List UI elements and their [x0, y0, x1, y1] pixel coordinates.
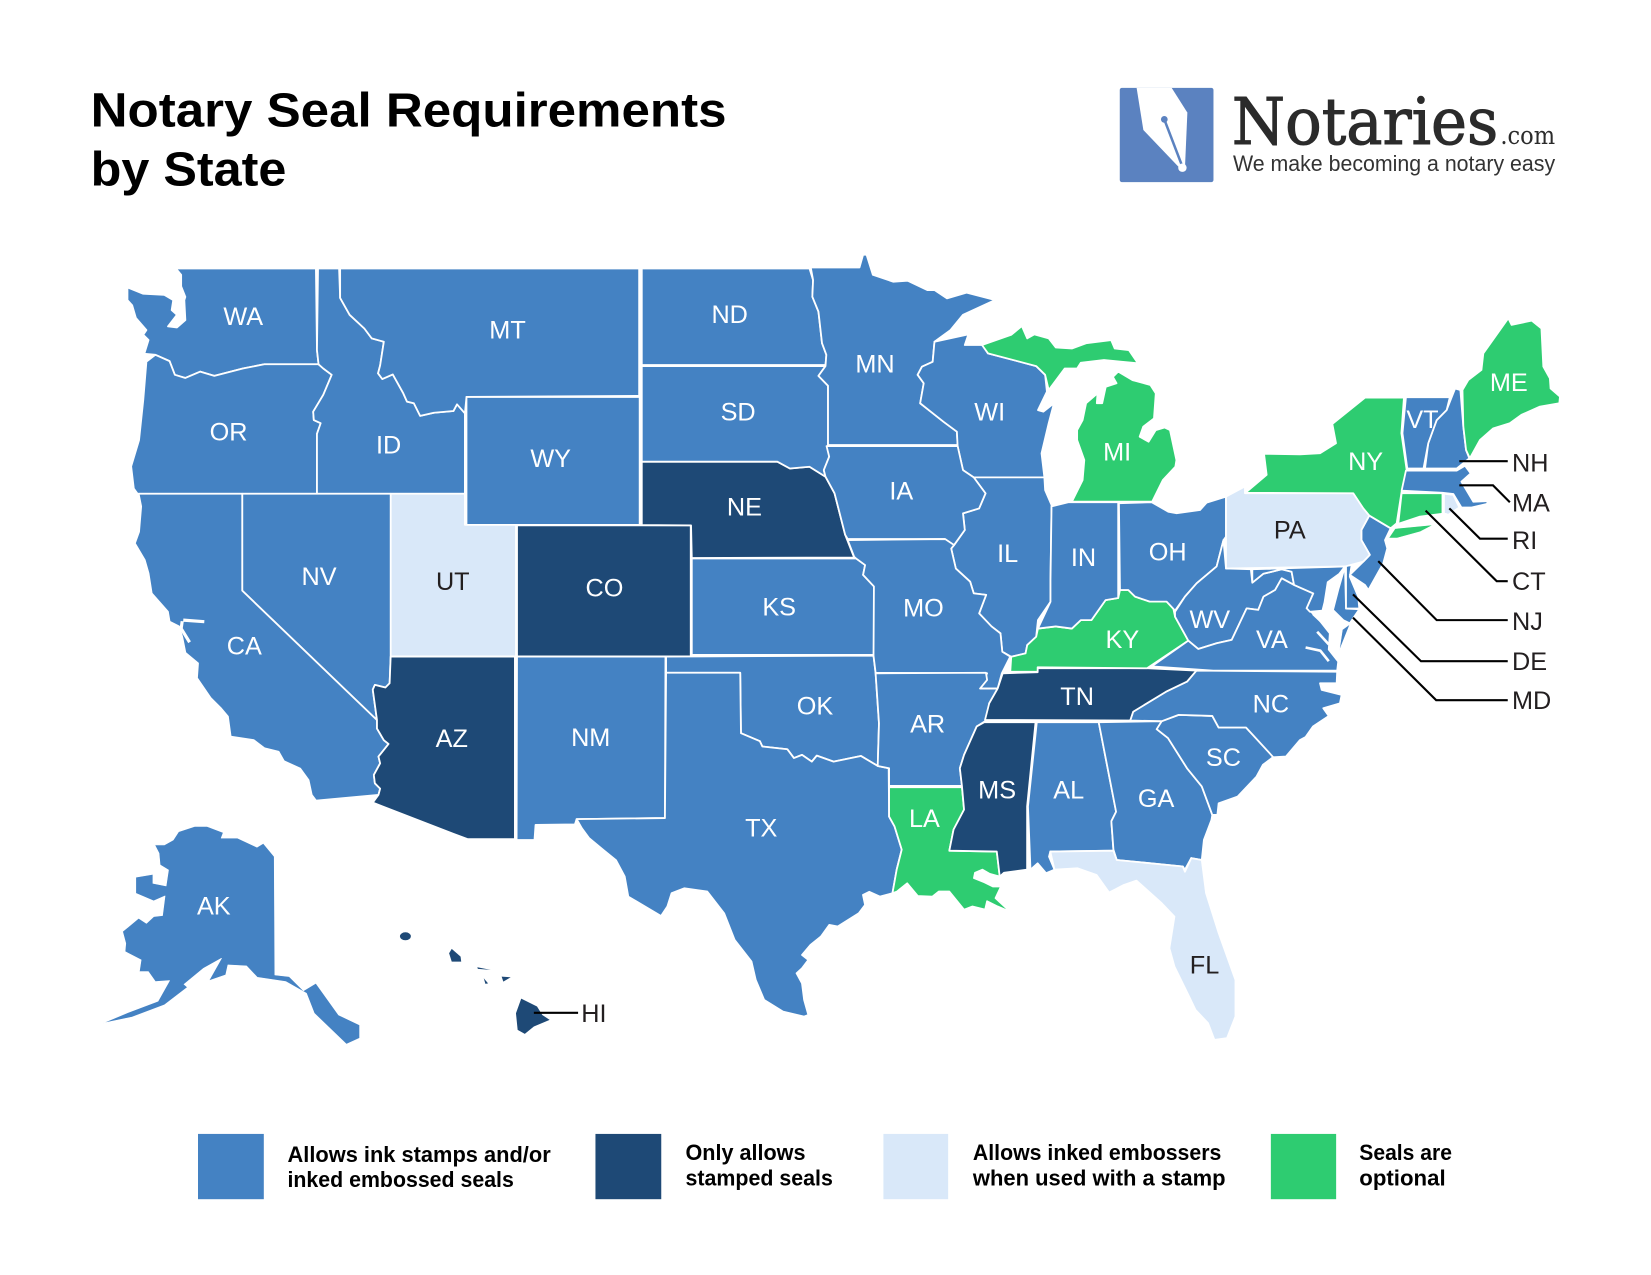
state: UT: UT	[436, 568, 470, 596]
state: RI	[1444, 494, 1459, 515]
state: SC	[1157, 715, 1273, 815]
legend item: inked embossers: Allows inked embossers	[973, 1140, 1221, 1165]
state: MN: MN	[855, 350, 895, 378]
state: OH	[1119, 497, 1226, 611]
legend item: inked embossers	[883, 1134, 1226, 1199]
callout: MD label and leader	[1353, 618, 1551, 715]
state: KY: KY	[1106, 626, 1139, 654]
state: IN	[1038, 502, 1118, 629]
state: MS	[949, 722, 1036, 877]
callout: NH label and leader: NH	[1512, 449, 1548, 477]
state: KS: KS	[762, 593, 796, 621]
legend item: stamped only	[595, 1134, 833, 1199]
title: Notary Seal Requirements	[91, 83, 727, 137]
state: NJ	[1350, 516, 1391, 590]
state: AR	[876, 673, 998, 786]
state: AR: AR	[910, 710, 945, 738]
state: WI	[918, 334, 1054, 477]
icon: pen nib	[1120, 88, 1213, 182]
logo tagline: We make becoming a notary easy	[1233, 151, 1555, 176]
state: VA: VA	[1256, 626, 1288, 654]
state: AK	[102, 826, 360, 1044]
state: VA	[1152, 578, 1350, 671]
state: KY	[1010, 590, 1188, 672]
legend item: optional: Seals are	[1359, 1140, 1452, 1165]
callout: HI label and leader	[534, 1000, 606, 1028]
state: WA	[127, 268, 319, 378]
state: SD: SD	[721, 399, 756, 427]
state: MT: MT	[489, 317, 526, 345]
state: HI	[400, 932, 550, 1034]
state: VT	[1402, 397, 1450, 469]
state: MA	[1402, 466, 1488, 507]
state: IA: IA	[889, 478, 913, 506]
state: AK: AK	[197, 893, 231, 921]
callout: NJ label and leader	[1378, 561, 1543, 636]
state: TN: TN	[1060, 683, 1094, 711]
state: NM: NM	[571, 724, 610, 752]
state: MD	[1252, 566, 1359, 623]
legend item: inked embossers: when used with a stamp	[972, 1166, 1226, 1191]
state: NV	[242, 494, 391, 720]
state: AZ	[373, 657, 515, 839]
callout: RI label and leader: RI	[1512, 527, 1537, 555]
state: FL	[1050, 851, 1235, 1040]
state: FL: FL	[1190, 951, 1219, 979]
state: MI	[982, 326, 1176, 502]
state: TX: TX	[745, 815, 778, 843]
logo wordmark: Notaries	[1232, 85, 1498, 160]
state: WY	[466, 397, 640, 525]
state: ME: ME	[1490, 369, 1528, 397]
state: MI: MI	[1103, 439, 1131, 467]
legend item: ink stamps: Allows ink stamps and/or	[287, 1142, 551, 1167]
state: ND: ND	[711, 301, 748, 329]
state: IL	[951, 477, 1052, 657]
state: AZ: AZ	[436, 725, 468, 753]
callout: DE label and leader: DE	[1512, 648, 1547, 676]
state: LA: LA	[909, 805, 940, 833]
title: by State	[91, 142, 286, 196]
state: OH: OH	[1149, 539, 1187, 567]
state: DE	[1346, 565, 1359, 609]
state: NY: NY	[1348, 448, 1383, 476]
state: NH	[1425, 389, 1469, 469]
state: CO	[517, 525, 691, 656]
callout: RI label and leader	[1449, 508, 1537, 555]
state: AL	[1028, 722, 1116, 873]
state: NC	[1130, 671, 1342, 757]
state: ID: ID	[376, 431, 401, 459]
state: MS: MS	[978, 777, 1016, 805]
legend item: stamped only: Only allows	[685, 1140, 805, 1165]
state: VT: VT	[1406, 406, 1439, 434]
logo: Notaries.com	[1120, 85, 1555, 182]
state: GA	[1099, 721, 1212, 870]
state: CT	[1398, 493, 1442, 524]
callout: MA label and leader	[1459, 485, 1550, 517]
legend item: ink stamps	[198, 1134, 551, 1199]
legend item: optional: optional	[1359, 1166, 1446, 1191]
callout: MA label and leader: MA	[1512, 489, 1550, 517]
state: IL: IL	[997, 540, 1018, 568]
state: OR	[131, 355, 332, 494]
state: WV: WV	[1189, 606, 1230, 634]
legend item: optional	[1271, 1134, 1452, 1199]
state: UT	[391, 494, 516, 656]
callout: CT label and leader: CT	[1512, 568, 1546, 596]
state: CO: CO	[585, 575, 623, 603]
callout: HI label and leader: HI	[581, 1000, 606, 1028]
callout: MD label and leader: MD	[1512, 687, 1551, 715]
state: SC: SC	[1206, 744, 1241, 772]
legend item: stamped only: stamped seals	[685, 1166, 833, 1191]
state: OK: OK	[797, 692, 833, 720]
state: WV	[1175, 540, 1294, 649]
state: PA	[1226, 486, 1370, 569]
state: ND	[642, 268, 826, 365]
state: TN	[985, 668, 1196, 721]
map of US states	[102, 255, 1560, 1044]
state: WI: WI	[974, 399, 1005, 427]
state: KS	[692, 558, 874, 655]
state: NY	[1246, 398, 1433, 538]
callout: NH label and leader	[1459, 449, 1548, 477]
state: MT	[340, 268, 639, 416]
state: WA: WA	[223, 303, 263, 331]
state: OK	[666, 656, 879, 766]
state: NV: NV	[302, 563, 337, 591]
state: ID	[313, 268, 465, 494]
state: NE: NE	[727, 493, 762, 521]
callout: DE label and leader	[1353, 594, 1547, 676]
state: NC: NC	[1253, 690, 1289, 718]
state: MO: MO	[903, 595, 944, 623]
state: IN: IN	[1071, 544, 1096, 572]
callout: NJ label and leader: NJ	[1512, 608, 1543, 636]
state: WY: WY	[530, 445, 571, 473]
state: MO	[848, 539, 1010, 689]
state: MN	[811, 255, 995, 445]
callout: CT label and leader	[1426, 511, 1546, 596]
state: NE	[642, 462, 854, 558]
state: GA: GA	[1138, 785, 1174, 813]
state: ME	[1462, 318, 1560, 458]
logo domain: .com	[1500, 121, 1555, 150]
state: CA	[135, 494, 389, 801]
state: PA: PA	[1274, 517, 1306, 545]
state: TX	[577, 673, 902, 1017]
state: OR: OR	[210, 419, 247, 447]
state: CA: CA	[227, 632, 262, 660]
legend	[198, 1134, 1452, 1199]
state: SD	[642, 366, 829, 477]
legend item: ink stamps: inked embossed seals	[287, 1167, 514, 1192]
state: LA	[889, 787, 1010, 912]
state: IA	[824, 446, 986, 545]
state: NM	[517, 657, 665, 840]
title	[91, 83, 727, 196]
state: AL: AL	[1053, 777, 1084, 805]
